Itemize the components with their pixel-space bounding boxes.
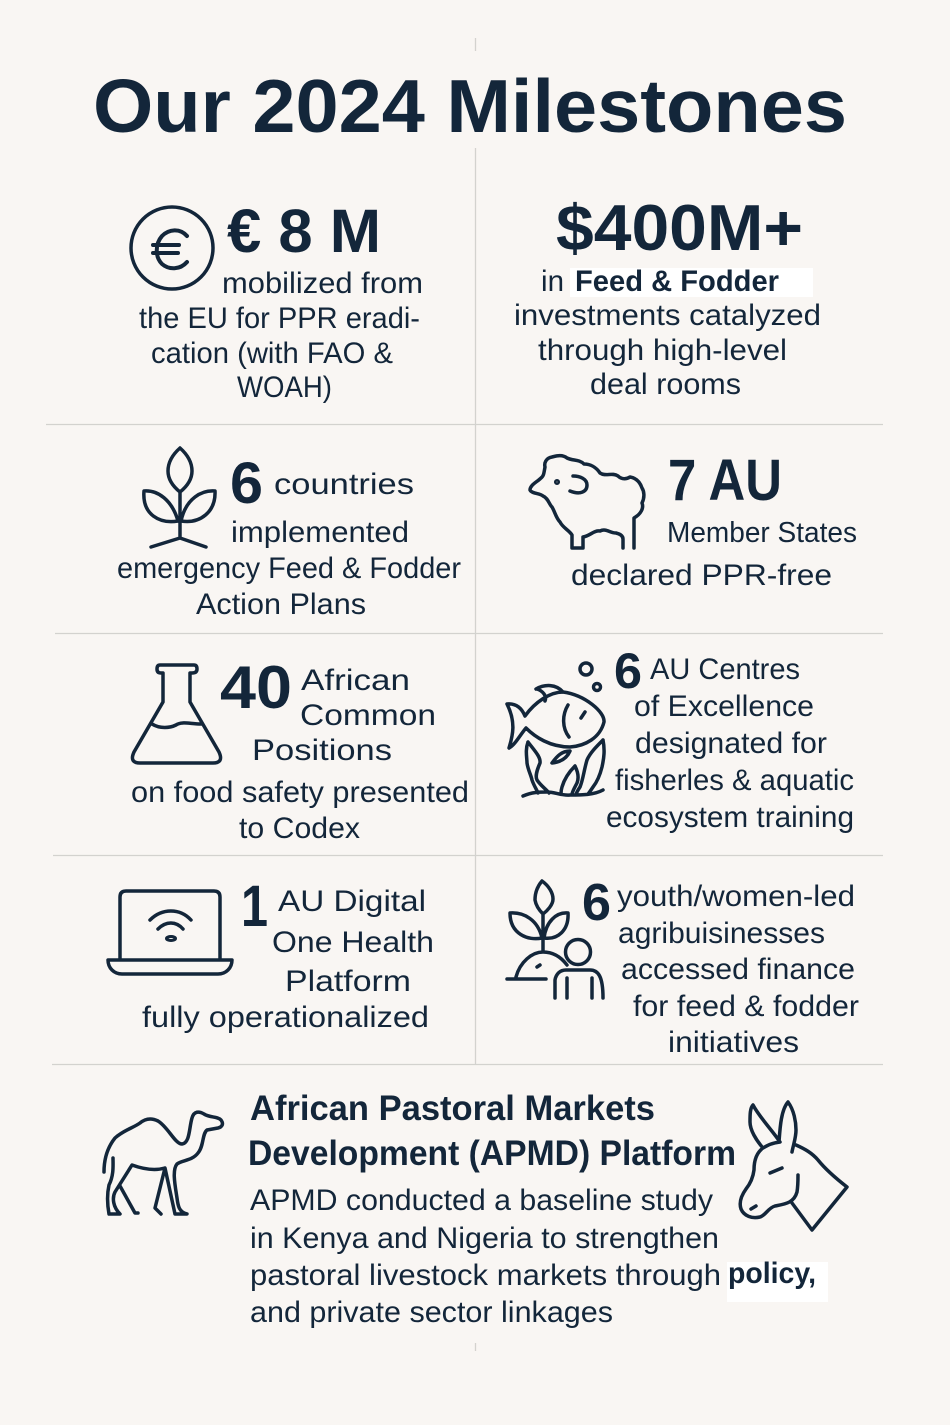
text: common positions description: to Codex — [239, 812, 360, 845]
text: action plans description: emergency Feed & Fodder — [117, 552, 461, 585]
stat: 40: 40 — [220, 654, 292, 721]
icon: plant and person — [507, 881, 603, 998]
text: common positions description: Common — [300, 699, 436, 732]
stat: 1 platform: 1 — [241, 874, 268, 939]
text: APMD description: and private sector linkages — [250, 1296, 613, 1329]
panel: common positions — [131, 654, 469, 845]
text: action plans description: countries — [274, 468, 414, 501]
text: centres description: designated for — [635, 727, 827, 760]
stat: 6 countries: 6 — [230, 451, 263, 516]
text: agribusinesses description — [617, 880, 859, 1059]
text: centres description: AU Centres — [650, 653, 800, 686]
text: platform description — [142, 885, 434, 1034]
text: investment description: Feed & Fodder — [575, 265, 779, 298]
icon: sheep — [530, 456, 644, 548]
heading: APMD platform: African Pastoral Markets — [250, 1089, 655, 1128]
text: platform description: fully operationalized — [142, 1001, 429, 1034]
text: PPR-free description: Member States — [667, 517, 857, 549]
text: investment description: deal rooms — [590, 368, 741, 401]
text: action plans description: Action Plans — [196, 588, 366, 621]
panel: centres of excellence — [507, 643, 854, 834]
text: platform description: AU Digital — [278, 885, 426, 918]
text: EU funding description — [139, 267, 423, 404]
text: action plans description — [117, 468, 461, 621]
text: centres description: ecosystem training — [606, 801, 854, 834]
text: centres description: of Excellence — [634, 690, 814, 723]
stat: 7 AU: 7 AU — [668, 448, 782, 513]
text: investment description: investments catalyzed — [514, 299, 821, 332]
text: common positions description: on food safety presented — [131, 776, 469, 809]
icon: flask — [132, 665, 221, 763]
text: agribusinesses description: youth/women-led — [617, 880, 855, 913]
text: platform description: Platform — [285, 965, 411, 998]
panel: action plans — [117, 448, 461, 621]
text: agribusinesses description: initiatives — [668, 1026, 799, 1059]
stat: 6 agribusinesses: 6 — [582, 874, 611, 932]
panel: APMD platform — [104, 1089, 847, 1329]
text: investment description — [514, 265, 821, 401]
text: PPR-free description — [571, 517, 857, 592]
text: PPR-free description: declared PPR-free — [571, 559, 832, 592]
text: APMD description: in Kenya and Nigeria to strengthen — [250, 1222, 719, 1255]
icon: euro coin — [131, 207, 213, 289]
heading: APMD platform: Development (APMD) Platform — [248, 1134, 736, 1173]
text: platform description: One Health — [272, 926, 434, 959]
text: investment description: in — [541, 265, 564, 298]
text: agribusinesses description: accessed finance — [621, 953, 855, 986]
panel: agribusinesses — [507, 874, 859, 1059]
text: investment description: through high-level — [538, 334, 787, 367]
text: agribusinesses description: agribuisinesses — [618, 917, 825, 950]
stat: 8 million euros: € 8 M — [227, 197, 381, 265]
text: APMD description: pastoral livestock markets through — [250, 1259, 721, 1292]
panel: feed and fodder investment — [514, 191, 821, 401]
icon: camel — [104, 1112, 222, 1214]
icon: plant — [144, 448, 215, 547]
text: action plans description: implemented — [231, 516, 409, 549]
panel: PPR-free states — [530, 448, 857, 592]
panel: EU funding — [131, 197, 423, 404]
text: common positions description — [131, 664, 469, 845]
icon: donkey — [740, 1102, 847, 1230]
text: common positions description: African — [301, 664, 410, 697]
text: centres description — [606, 653, 854, 834]
text: centres description: fisherles & aquatic — [615, 764, 854, 797]
text: EU funding description: cation (with FAO & — [151, 337, 393, 370]
heading: APMD platform — [248, 1089, 736, 1173]
stat: 6 centres: 6 — [614, 643, 642, 699]
text: APMD description — [250, 1184, 828, 1329]
panel: digital platform — [108, 874, 434, 1034]
text: EU funding description: WOAH) — [237, 371, 332, 404]
text: APMD description: APMD conducted a baseline study — [250, 1184, 713, 1217]
stat: 400 million dollars: $400M+ — [556, 191, 803, 264]
text: APMD description: policy, — [728, 1257, 816, 1290]
title: Our 2024 Milestones — [93, 64, 847, 148]
text: agribusinesses description: for feed & fodder — [633, 990, 859, 1023]
text: EU funding description: the EU for PPR eradi- — [139, 302, 420, 335]
text: common positions description: Positions — [252, 734, 392, 767]
icon: fish and seaweed — [507, 663, 604, 796]
text: EU funding description: mobilized from — [222, 267, 423, 300]
icon: laptop with wifi — [108, 891, 232, 974]
